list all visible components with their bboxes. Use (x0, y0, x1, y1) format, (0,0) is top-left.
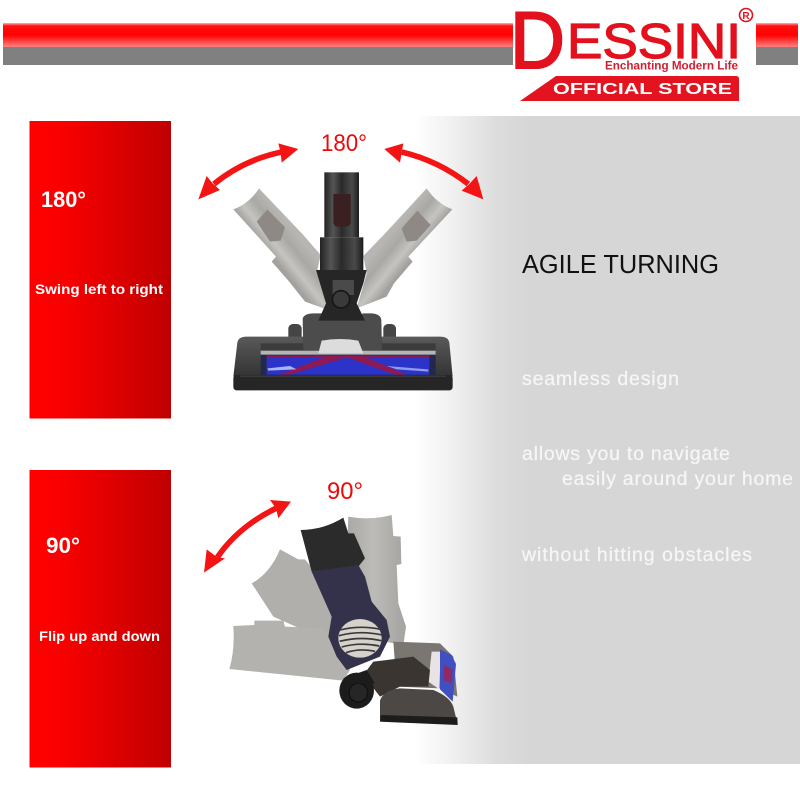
silver lens (318, 339, 363, 353)
ghost upright tube (347, 515, 406, 645)
header bar (3, 23, 798, 65)
panel value 180: 180° (41, 187, 86, 212)
logo wordmark: ESSINI (567, 15, 741, 69)
navy neck (312, 565, 390, 670)
official store banner (520, 76, 739, 101)
registered mark: R (742, 11, 750, 22)
brush roller (261, 354, 436, 375)
ghost angled tube (252, 549, 337, 652)
label 180 degrees: 180° (321, 130, 367, 157)
description text: allows you to navigate (522, 443, 730, 465)
red arrow left (198, 143, 298, 199)
nozzle wheel (339, 670, 375, 709)
logo wordmark (510, 0, 741, 86)
panel value 90: 90° (46, 533, 80, 558)
dark tube (301, 518, 365, 572)
nozzle wheels (288, 324, 396, 341)
label 90 degrees: 90° (327, 478, 363, 505)
description text: seamless design (522, 368, 679, 390)
brand logo (510, 0, 756, 106)
grey background panel (415, 116, 800, 764)
red arrow (204, 500, 291, 573)
illustration: upright nozzle swinging 180 degrees (198, 143, 483, 390)
panel: 180 degree swing (30, 121, 171, 418)
ghost flat tube (229, 621, 350, 681)
registered mark (740, 8, 752, 22)
description text: easily around your home (562, 468, 793, 490)
panel caption flip: Flip up and down (39, 628, 160, 644)
description text (521, 368, 793, 566)
panel: 90 degree flip (30, 470, 171, 768)
logo tagline: Enchanting Modern Life (605, 60, 738, 72)
heading: AGILE TURNING (522, 249, 719, 279)
official store banner: OFFICIAL STORE (553, 81, 732, 98)
upright tube (324, 172, 359, 237)
ghost nozzle left (233, 188, 327, 309)
description text: without hitting obstacles (521, 544, 752, 566)
illustration: nozzle flipping 90 degrees (204, 500, 458, 725)
nozzle head (233, 313, 453, 390)
nozzle body (363, 642, 458, 725)
spring coil (338, 619, 382, 658)
nozzle neck (316, 237, 367, 321)
ghost nozzle right (357, 188, 452, 308)
panel caption swing: Swing left to right (35, 281, 163, 297)
red arrow right (384, 143, 483, 199)
